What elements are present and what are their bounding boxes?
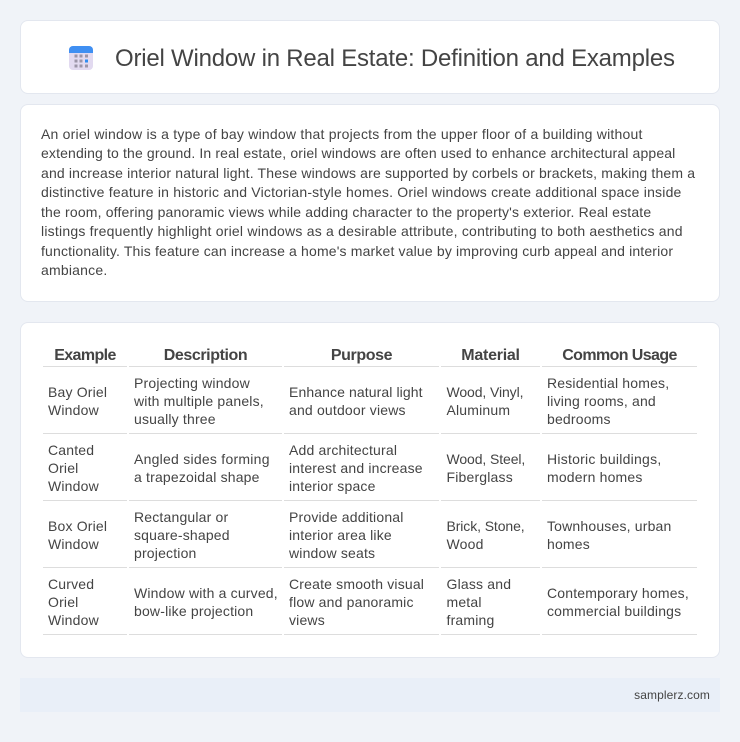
row: Bay Oriel Window: living rooms, and	[547, 393, 656, 409]
row: Canted Oriel Window: Historic buildings,	[547, 451, 661, 467]
row: Box Oriel Window: homes	[547, 536, 590, 552]
panel: definition paragraph: ambiance.	[41, 262, 107, 278]
row: Curved Oriel Window: Contemporary homes,	[547, 585, 689, 601]
row: Bay Oriel Window: Bay Oriel	[48, 384, 107, 400]
panel: definition paragraph: extending to the ground. In real estate, oriel windows are often used to enhance architectural appeal	[41, 145, 675, 161]
row: Canted Oriel Window: modern homes	[547, 469, 643, 485]
row: Box Oriel Window	[48, 509, 671, 561]
row: Curved Oriel Window	[48, 576, 689, 628]
row: Canted Oriel Window: a trapezoidal shape	[134, 469, 260, 485]
row: Curved Oriel Window: Oriel	[48, 594, 78, 610]
row: Curved Oriel Window: bow-like projection	[134, 603, 253, 619]
row: Curved Oriel Window: Window with a curved,	[134, 585, 278, 601]
row: Bay Oriel Window	[48, 375, 669, 427]
panel: definition paragraph: the room, offering panoramic views while adding character to the property's exterior. Real estate	[41, 204, 651, 220]
panel: definition paragraph: distinctive feature in historic and Victorian-style homes. Oriel windows create additional space inside	[41, 184, 682, 200]
row: Canted Oriel Window: Angled sides forming	[134, 451, 270, 467]
row: Curved Oriel Window: commercial buildings	[547, 603, 681, 619]
row: Canted Oriel Window: Fiberglass	[446, 469, 513, 485]
row: Canted Oriel Window: Add architectural	[289, 442, 397, 458]
row: Curved Oriel Window: flow and panoramic	[289, 594, 414, 610]
row: Canted Oriel Window: Canted	[48, 442, 94, 458]
row: Bay Oriel Window: Enhance natural light	[289, 384, 423, 400]
row: Curved Oriel Window: metal	[446, 594, 482, 610]
row: Curved Oriel Window: framing	[446, 612, 494, 628]
row: Box Oriel Window: window seats	[289, 545, 375, 561]
row: Bay Oriel Window: Window	[48, 402, 99, 418]
table header: Example	[54, 347, 116, 364]
row: Canted Oriel Window: Window	[48, 478, 99, 494]
panel: definition paragraph	[20, 104, 720, 302]
row: Canted Oriel Window: Oriel	[48, 460, 78, 476]
row: Curved Oriel Window: Curved	[48, 576, 94, 592]
table header	[54, 347, 677, 364]
row: Canted Oriel Window: interest and increase	[289, 460, 423, 476]
row: Box Oriel Window: Townhouses, urban	[547, 518, 671, 534]
row: Bay Oriel Window: Wood, Vinyl,	[446, 384, 523, 400]
row: Box Oriel Window: Brick, Stone,	[446, 518, 525, 534]
row: Bay Oriel Window: usually three	[134, 411, 216, 427]
row: Curved Oriel Window: Window	[48, 612, 99, 628]
title: Oriel Window in Real Estate: Definition and Examples	[115, 45, 675, 72]
row: Canted Oriel Window: interior space	[289, 478, 376, 494]
row: Bay Oriel Window: Residential homes,	[547, 375, 669, 391]
row rules	[43, 366, 697, 635]
table header: Material	[461, 347, 520, 364]
footer bar	[20, 678, 720, 712]
row: Bay Oriel Window: Projecting window	[134, 375, 250, 391]
row: Box Oriel Window: Rectangular or	[134, 509, 228, 525]
panel: definition paragraph: and increase interior natural light. These windows are supported by corbels or brackets, making them a	[41, 165, 695, 181]
row: Box Oriel Window: Window	[48, 536, 99, 552]
row: Box Oriel Window: square-shaped	[134, 527, 230, 543]
row: Curved Oriel Window: Glass and	[446, 576, 511, 592]
row: Box Oriel Window: projection	[134, 545, 197, 561]
row: Bay Oriel Window: Aluminum	[446, 402, 510, 418]
panel: examples table	[20, 322, 720, 658]
row: Box Oriel Window: interior area like	[289, 527, 392, 543]
row: Canted Oriel Window: Wood, Steel,	[446, 451, 525, 467]
title card	[20, 20, 720, 94]
panel: definition paragraph: An oriel window is a type of bay window that projects from the upper floor of a building without	[41, 126, 643, 142]
row: Box Oriel Window: Wood	[446, 536, 484, 552]
row: Bay Oriel Window: and outdoor views	[289, 402, 406, 418]
row: Box Oriel Window: Box Oriel	[48, 518, 107, 534]
footer source text: samplerz.com	[634, 688, 710, 702]
row: Bay Oriel Window: bedrooms	[547, 411, 611, 427]
table header: Common Usage	[562, 347, 677, 364]
row: Curved Oriel Window: Create smooth visual	[289, 576, 424, 592]
row: Canted Oriel Window	[48, 442, 661, 494]
row: Bay Oriel Window: with multiple panels,	[134, 393, 264, 409]
row: Curved Oriel Window: views	[289, 612, 325, 628]
table header: Description	[164, 347, 247, 364]
table header: Purpose	[331, 347, 392, 364]
panel: definition paragraph: functionality. This feature can increase a home's market value by improving curb appeal and interior	[41, 243, 673, 259]
row: Box Oriel Window: Provide additional	[289, 509, 404, 525]
panel: definition paragraph: listings frequently highlight oriel windows as a desirable attribute, contributing to both aesthetics and	[41, 223, 683, 239]
icon: calendar window	[69, 46, 93, 70]
